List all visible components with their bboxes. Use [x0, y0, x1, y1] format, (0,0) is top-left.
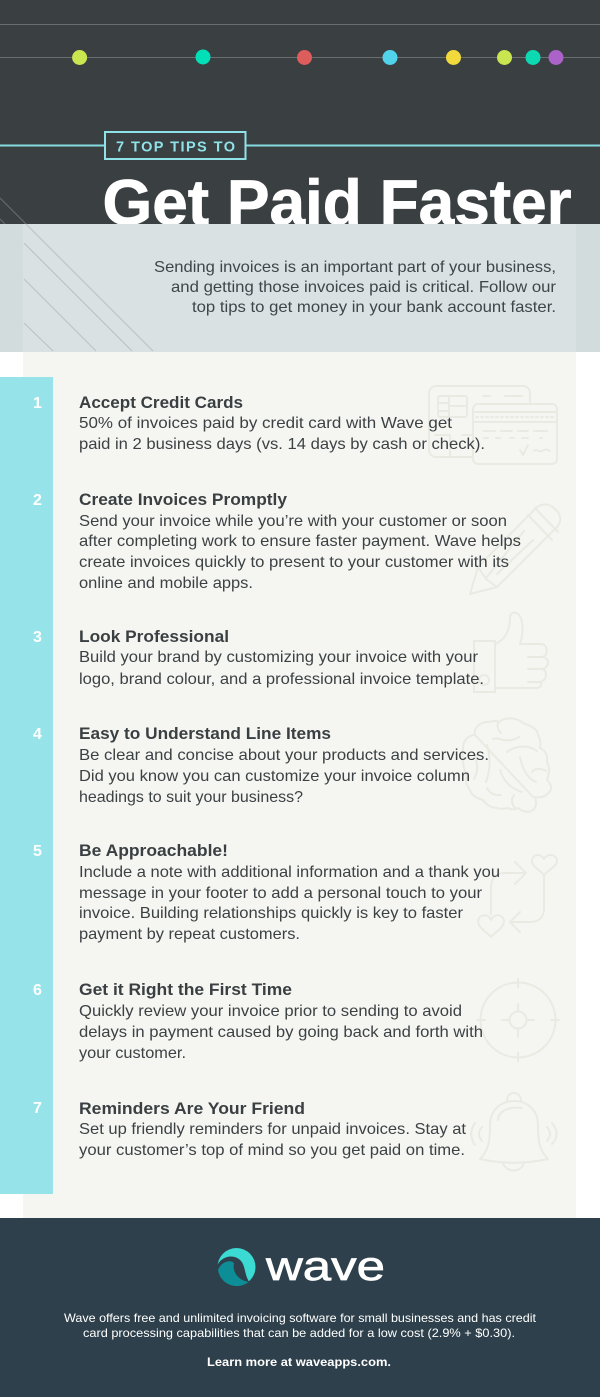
- heading and body: [79, 981, 483, 1062]
- heading and body: [79, 1100, 467, 1159]
- heading and body: Easy to Understand Line Items: [79, 725, 331, 743]
- icon: target: [477, 979, 559, 1061]
- heading and body: [79, 725, 489, 806]
- heading and body: Send your invoice while you’re with your customer or soon: [79, 513, 507, 530]
- number 4: 4: [33, 726, 42, 743]
- tip 4: easy to understand line items: [33, 718, 551, 812]
- heading and body: Reminders Are Your Friend: [79, 1100, 305, 1118]
- intro panel: [0, 224, 600, 352]
- number 6: 6: [33, 982, 42, 999]
- intro text: top tips to get money in your bank account faster.: [192, 299, 556, 316]
- footer panel: [0, 1218, 600, 1397]
- icon: brain: [463, 718, 551, 812]
- icon: hearts and arrows: [478, 855, 557, 937]
- intro text: [154, 259, 557, 316]
- eyebrow label: 7 top tips to: [0, 132, 600, 159]
- icon: thumbs up: [474, 613, 548, 692]
- heading and body: create invoices quickly to present to your customer with its: [79, 554, 509, 571]
- heading and body: Set up friendly reminders for unpaid invoices. Stay at: [79, 1121, 467, 1138]
- heading and body: logo, brand colour, and a professional invoice template.: [79, 671, 484, 688]
- heading and body: invoice. Building relationships quickly is key to faster: [79, 905, 464, 922]
- diagonal line decoration: [24, 224, 153, 351]
- tip 7: reminders are your friend: [33, 1093, 556, 1170]
- icon: pencil: [470, 504, 560, 594]
- tip 1: accept credit cards: [33, 386, 557, 464]
- heading and body: Create Invoices Promptly: [79, 491, 288, 509]
- number sidebar: [0, 377, 53, 1194]
- tip 5: be approachable: [33, 842, 557, 943]
- heading and body: [79, 394, 485, 453]
- number 7: 7: [33, 1100, 42, 1117]
- heading and body: Be clear and concise about your products and services.: [79, 747, 489, 764]
- heading and body: Did you know you can customize your invoice column: [79, 768, 470, 785]
- heading and body: online and mobile apps.: [79, 575, 253, 592]
- footer description: [64, 1311, 537, 1340]
- tips panel background: [23, 352, 576, 1218]
- heading and body: payment by repeat customers.: [79, 926, 300, 943]
- eyebrow label: 7 top tips to: 7 TOP TIPS TO: [116, 140, 235, 156]
- tip 6: get it right the first time: [33, 979, 559, 1062]
- tip 3: look professional: [33, 613, 548, 692]
- title: Get Paid Faster: [102, 166, 572, 238]
- heading and body: paid in 2 business days (vs. 14 days by cash or check).: [79, 436, 485, 453]
- heading and body: Be Approachable!: [79, 842, 228, 860]
- heading and body: Build your brand by customizing your invoice with your: [79, 649, 479, 666]
- heading and body: after completing work to ensure faster payment. Wave helps: [79, 533, 521, 550]
- number 2: 2: [33, 492, 42, 509]
- heading and body: delays in payment caused by going back and forth with: [79, 1024, 483, 1041]
- heading and body: your customer’s top of mind so you get paid on time.: [79, 1142, 465, 1159]
- heading and body: [79, 628, 484, 688]
- icon: wave mark: [216, 1248, 256, 1290]
- intro text: and getting those invoices paid is critical. Follow our: [171, 279, 557, 296]
- intro text: Sending invoices is an important part of your business,: [154, 259, 556, 276]
- icon: bell: [471, 1093, 556, 1170]
- heading and body: message in your footer to add a personal touch to your: [79, 885, 483, 902]
- wordmark: wave: [265, 1243, 385, 1289]
- heading and body: [79, 842, 500, 943]
- heading and body: Accept Credit Cards: [79, 394, 243, 412]
- footer description: card processing capabilities that can be added for a low cost (2.9% + $0.30).: [83, 1326, 515, 1340]
- number 1: 1: [33, 395, 42, 412]
- heading and body: Get it Right the First Time: [79, 981, 292, 999]
- heading and body: headings to suit your business?: [79, 789, 303, 806]
- icon: credit cards: [429, 386, 557, 464]
- coloured timeline dots: [72, 50, 563, 65]
- header panel: [0, 0, 600, 238]
- heading and body: Look Professional: [79, 628, 229, 646]
- call to action: Learn more at waveapps.com.: [207, 1355, 391, 1369]
- number 3: 3: [33, 629, 42, 646]
- tip 2: create invoices promptly: [33, 491, 560, 594]
- heading and body: 50% of invoices paid by credit card with Wave get: [79, 415, 453, 432]
- heading and body: [79, 491, 521, 592]
- number 5: 5: [33, 843, 42, 860]
- footer description: Wave offers free and unlimited invoicing software for small businesses and has credit: [64, 1311, 537, 1325]
- heading and body: your customer.: [79, 1045, 186, 1062]
- heading and body: Include a note with additional information and a thank you: [79, 864, 500, 881]
- wave logo: [216, 1243, 385, 1290]
- heading and body: Quickly review your invoice prior to sending to avoid: [79, 1003, 462, 1020]
